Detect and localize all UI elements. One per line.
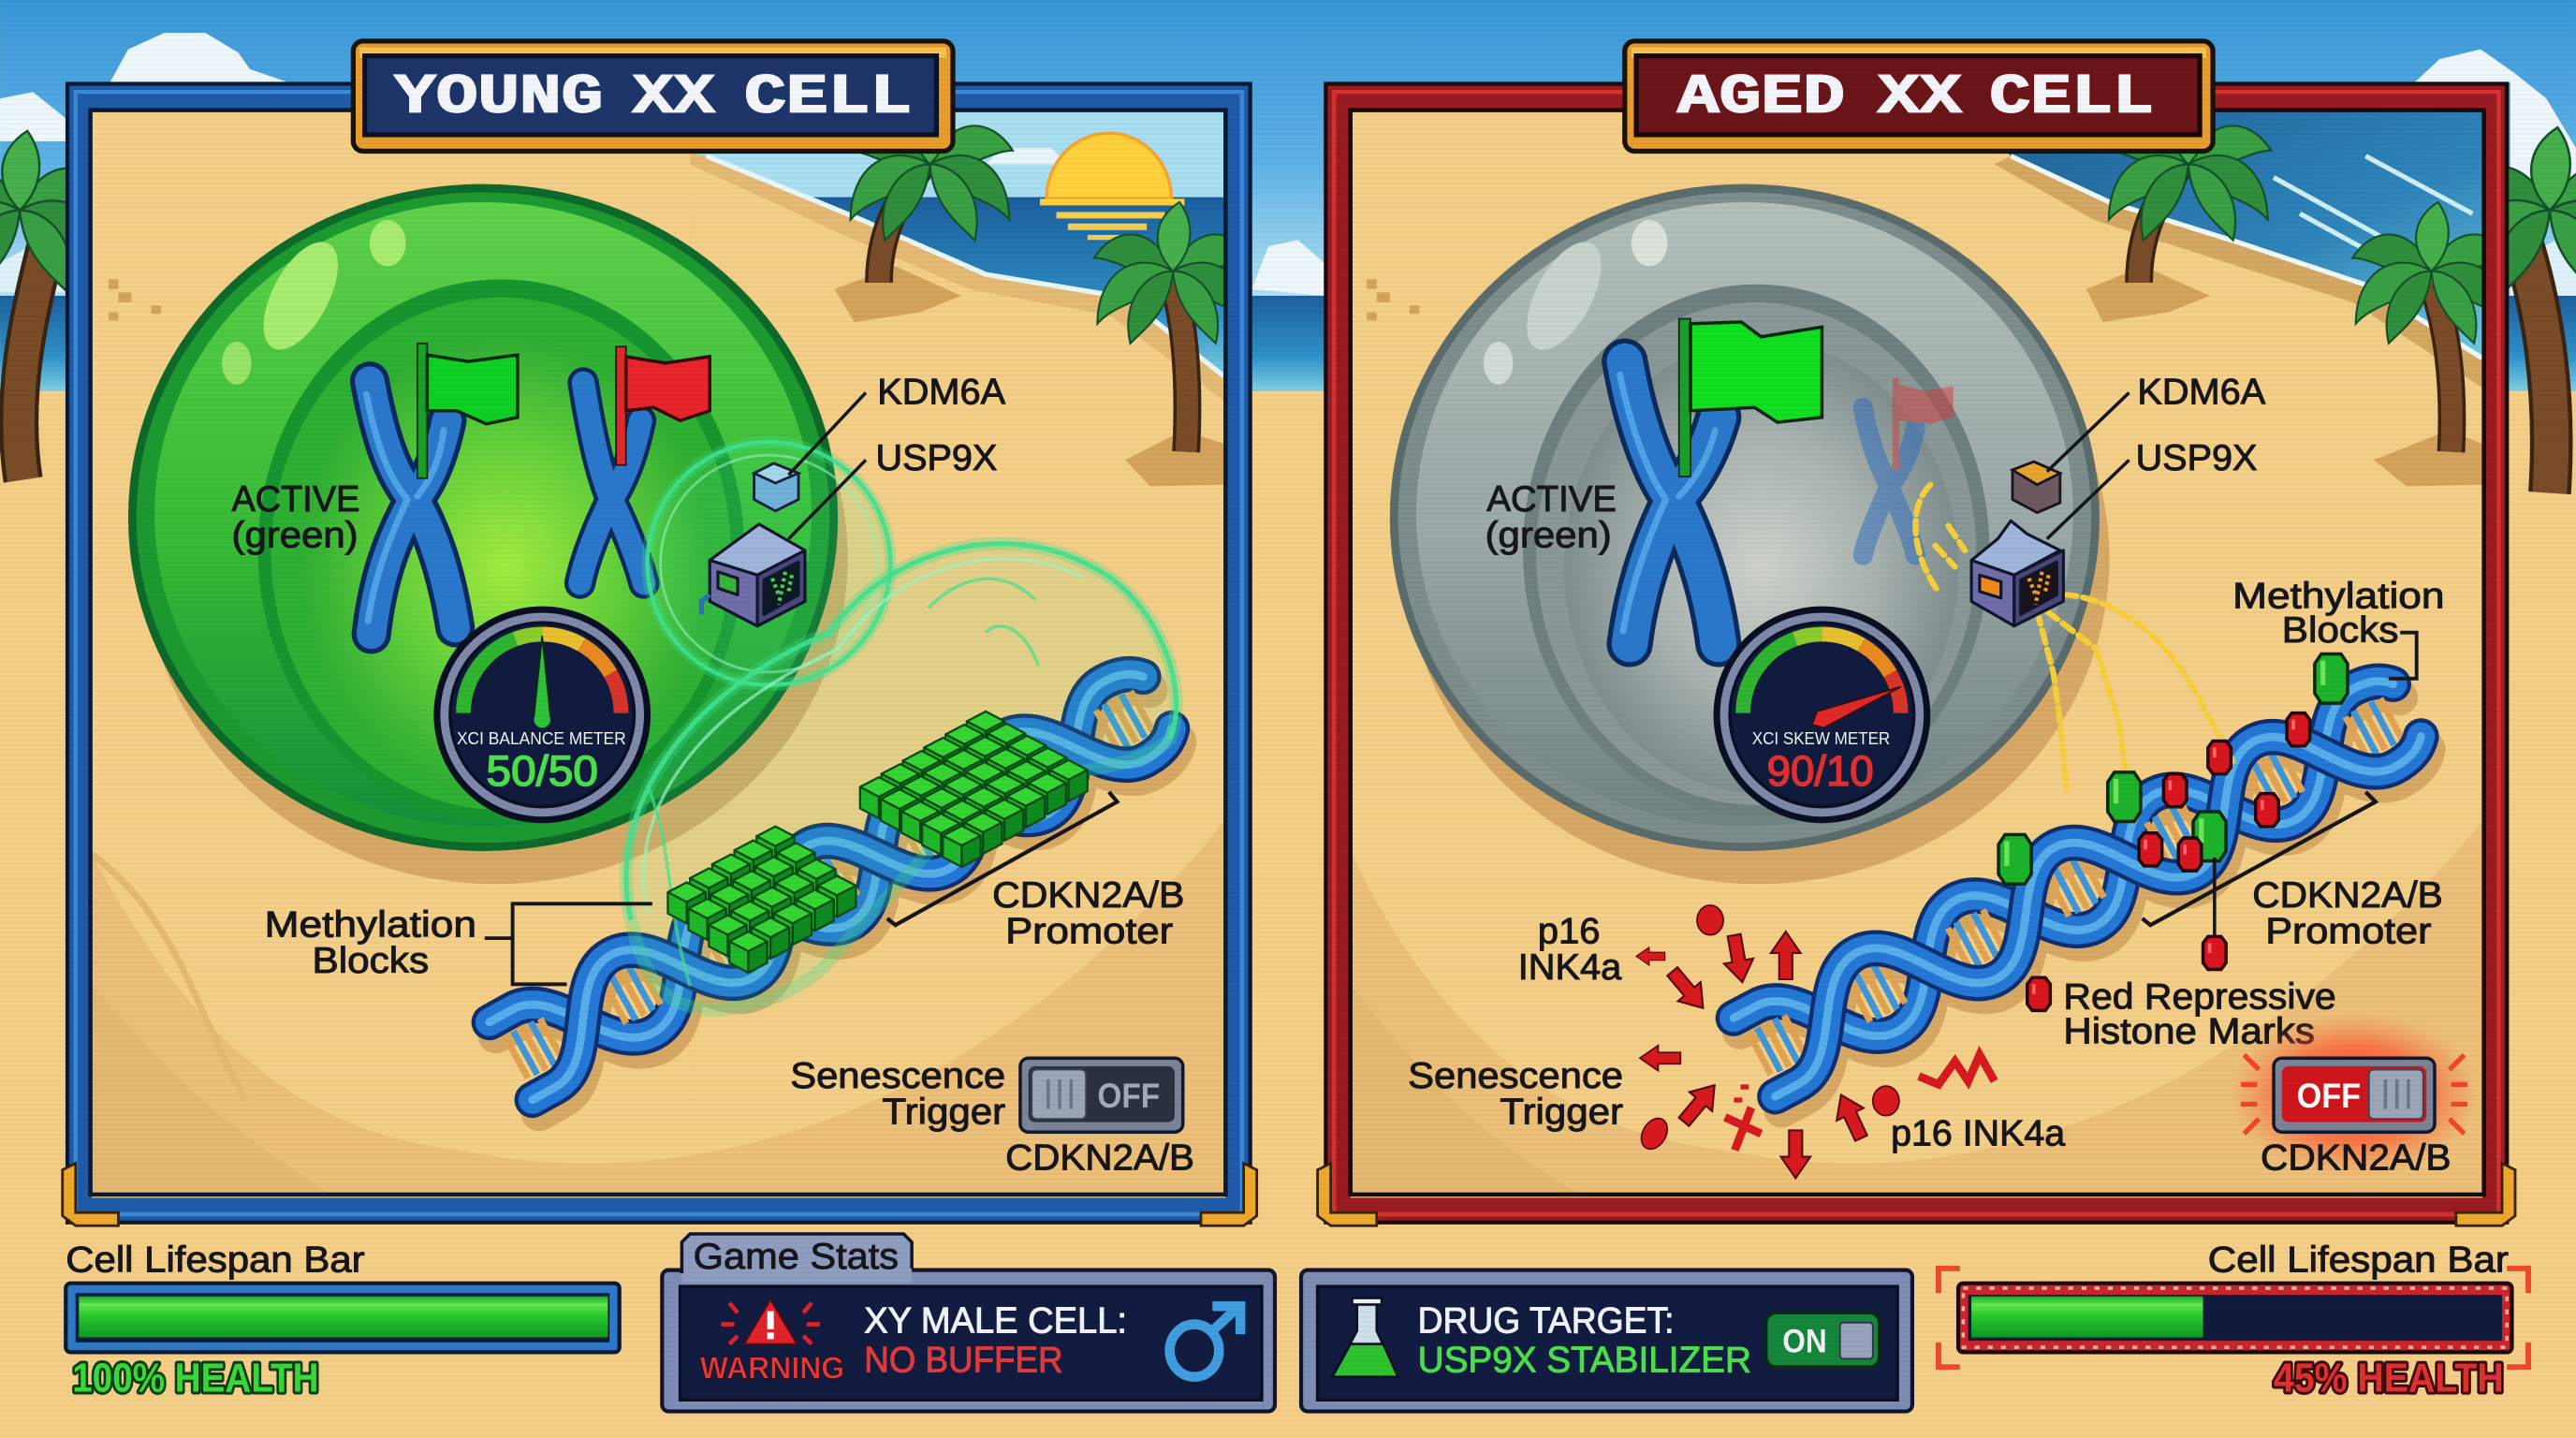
labels: KDM6A and USP9X with leaders: USP9X (875, 438, 997, 478)
lifespan bar: aged (1939, 1240, 2528, 1401)
red p16 arrows bursting from DNA (1636, 905, 1995, 1178)
aged grey cell (1390, 184, 2100, 851)
legend: red repressive histone marks: Red Repressive (2063, 977, 2336, 1018)
methylation blocks: second group (860, 712, 1088, 867)
label: methylation blocks with bracket: Methylation (265, 904, 476, 945)
lifespan bar: young: Cell Lifespan Bar (66, 1240, 365, 1280)
active chromosome with green flag (366, 344, 518, 634)
labels: KDM6A and USP9X with leaders: KDM6A (2137, 373, 2265, 413)
panel body (662, 1270, 1275, 1412)
label: p16 INK4a upper: p16 (1538, 911, 1600, 951)
label: CDKN2A/B promoter with bracket: CDKN2A/B (2252, 875, 2443, 916)
protective bubble around USP9X and promoter (626, 442, 1177, 1009)
text: drug target USP9X stabilizer (1418, 1300, 1751, 1380)
title: young XX cell: YOUNG (394, 65, 603, 128)
icon: KDM6A protein (754, 463, 798, 511)
icon: USP9X machine (701, 524, 805, 626)
senescence trigger toggle: on alarm: Senescence (1408, 1056, 1623, 1096)
cell shadow (145, 233, 848, 884)
beach backdrop: young panel (92, 92, 1251, 1249)
inactive chromosome with red flag (580, 346, 710, 583)
senescence trigger toggle: off: Senescence (790, 1056, 1005, 1096)
DNA strand: young (490, 664, 1186, 1113)
active chromosome with big green flag (1620, 318, 1822, 644)
title: young XX cell: XX (633, 65, 715, 128)
XCI balance meter (433, 607, 651, 823)
gold corners: blue frame (63, 1164, 1257, 1225)
tab: game stats (681, 1234, 912, 1284)
label: active (green): (green) (232, 515, 359, 555)
lifespan bar: young: 100% HEALTH (72, 1356, 319, 1401)
title: aged XX cell: XX (1878, 65, 1962, 128)
title: aged XX cell: AGED (1677, 65, 1845, 128)
label: methylation blocks with bracket: Blocks (2282, 610, 2398, 651)
senescence trigger toggle: off: OFF (1097, 1077, 1160, 1115)
label: p16 INK4a upper (1518, 911, 1622, 988)
toggle: on (1766, 1313, 1880, 1367)
label: active (green): ACTIVE (1486, 479, 1617, 520)
drug target panel (1301, 1270, 1912, 1412)
icon: damaged KDM6A (2012, 462, 2060, 513)
palm: upper middle (835, 125, 1015, 322)
XCI balance meter: XCI BALANCE METER (457, 728, 626, 748)
label: CDKN2A/B: CDKN2A/B (2261, 1138, 2452, 1179)
label: warning: WARNING (700, 1351, 844, 1386)
icon: damaged USP9X machine (1971, 521, 2063, 626)
text: drug target USP9X stabilizer: USP9X STABILIZER (1418, 1340, 1751, 1380)
senescence trigger toggle: on alarm (1408, 1012, 2479, 1177)
label: active (green) (232, 479, 359, 555)
senescence trigger toggle: on alarm: Trigger (1500, 1092, 1623, 1132)
label: methylation blocks with bracket: Methylation (2232, 576, 2445, 616)
label: CDKN2A/B promoter with bracket: Promoter (2265, 911, 2432, 951)
cell shadow (1406, 233, 2110, 884)
icon: flask (1332, 1298, 1398, 1377)
label: methylation blocks with bracket (2232, 576, 2445, 679)
XCI balance meter: 50/50 (487, 747, 598, 795)
label: CDKN2A/B promoter with bracket (887, 792, 1184, 951)
gold corners: red frame (1318, 1164, 2515, 1225)
lifespan bar: aged: Cell Lifespan Bar (2208, 1240, 2509, 1280)
title: young XX cell: CELL (744, 65, 912, 128)
green methylation markers (1998, 654, 2348, 884)
panel body (1301, 1270, 1912, 1412)
label: CDKN2A/B promoter with bracket: CDKN2A/B (992, 875, 1184, 916)
senescence trigger toggle: on alarm: OFF (2297, 1077, 2361, 1115)
labels: KDM6A and USP9X with leaders (2047, 373, 2265, 539)
beach backdrop: aged panel (1352, 92, 2510, 1193)
game stats panel: XY male warning (662, 1234, 1275, 1412)
label: methylation blocks with bracket (265, 903, 652, 984)
text: XY male cell no buffer: XY MALE CELL: (864, 1300, 1127, 1341)
palm: upper middle (2086, 125, 2273, 322)
palm: far left edge (0, 131, 110, 479)
red repressive histone marks (2139, 713, 2310, 969)
palm: right edge (2350, 200, 2482, 487)
panel: aged XX cell (1318, 41, 2515, 1225)
frame: blue (67, 84, 1251, 1223)
title: aged XX cell: CELL (1989, 65, 2154, 128)
young green cell (128, 184, 838, 851)
text: drug target USP9X stabilizer: DRUG TARGET: (1418, 1300, 1674, 1341)
label: p16 INK4a lower: p16 INK4a (1891, 1113, 2066, 1153)
icon: warning triangle (722, 1299, 820, 1344)
label: CDKN2A/B promoter with bracket (2143, 792, 2443, 951)
text: XY male cell no buffer: NO BUFFER (864, 1340, 1063, 1380)
labels: KDM6A and USP9X with leaders: USP9X (2136, 438, 2257, 478)
tab: game stats: Game Stats (694, 1237, 899, 1277)
DNA strand: aged (1734, 671, 2435, 1109)
label: CDKN2A/B promoter with bracket: Promoter (1005, 911, 1173, 951)
XCI skew meter (1714, 607, 1930, 823)
toggle: on: ON (1782, 1323, 1827, 1359)
legend: red repressive histone marks (2027, 977, 2336, 1051)
label: CDKN2A/B: CDKN2A/B (1005, 1138, 1194, 1179)
labels: KDM6A and USP9X with leaders (788, 373, 1005, 539)
legend: red repressive histone marks: Histone Marks (2063, 1011, 2315, 1051)
icon: male symbol (1170, 1306, 1240, 1377)
label: p16 INK4a upper: INK4a (1518, 947, 1622, 988)
lightning from broken USP9X (1915, 485, 2234, 801)
title: young XX cell (353, 41, 953, 151)
label: active (green) (1486, 479, 1617, 555)
frame: red (1325, 84, 2507, 1223)
label: active (green): (green) (1486, 515, 1612, 555)
palm: right edge (1092, 200, 1224, 487)
palm: far right edge (2455, 127, 2576, 493)
senescence trigger toggle: off (790, 1056, 1183, 1132)
faded inactive chromosome with red flag (1863, 378, 1954, 555)
title: aged XX cell (1625, 41, 2213, 151)
lifespan bar: young (66, 1240, 620, 1401)
labels: KDM6A and USP9X with leaders: KDM6A (877, 373, 1005, 413)
label: methylation blocks with bracket: Blocks (313, 941, 429, 981)
panel: young XX cell (63, 41, 1257, 1249)
XCI skew meter: 90/10 (1767, 747, 1874, 795)
methylation blocks: first group (667, 827, 856, 973)
senescence trigger toggle: off: Trigger (883, 1092, 1005, 1132)
XCI skew meter: XCI SKEW METER (1752, 728, 1890, 748)
text: XY male cell no buffer (864, 1300, 1127, 1380)
lifespan bar: aged: 45% HEALTH (2274, 1356, 2504, 1401)
label: active (green): ACTIVE (232, 479, 359, 520)
